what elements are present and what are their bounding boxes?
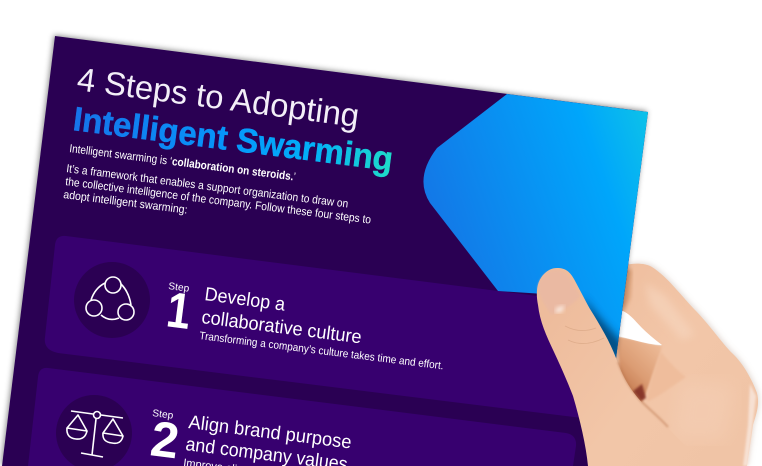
- paper sheet: [2, 36, 648, 466]
- thumb nail: [538, 270, 580, 315]
- hand: thumb: [537, 268, 705, 466]
- intro text: Intelligent swarming is ‘collaboration on steroids.’: [69, 143, 296, 184]
- step 2 heading: Align brand purpose: [187, 412, 353, 454]
- step 1 icon: collaboration circles: [74, 262, 150, 338]
- step 1 card: [45, 236, 600, 419]
- panel: step 2: [28, 368, 576, 466]
- intro text: adopt intelligent swarming:: [63, 189, 188, 217]
- thumb shadow on blue: [584, 296, 619, 358]
- step 2 icon: scales: [56, 395, 132, 466]
- knuckle lines: [565, 326, 604, 344]
- panel: step 1: [45, 236, 600, 419]
- step 2 card: [28, 368, 576, 466]
- title line 1: 4 Steps to Adopting: [75, 60, 361, 134]
- panel: step 1: collaborative culture: [200, 307, 363, 348]
- intro text: [63, 143, 372, 227]
- step 1 heading: Develop a: [203, 284, 287, 316]
- intro text: the collective intelligence of the company. Follow these four steps to: [65, 176, 372, 227]
- blue corner shape: [423, 94, 648, 358]
- title line 2: Intelligent Swarming: [71, 100, 395, 179]
- hand: fingers behind the paper: [590, 264, 758, 466]
- step 2 label: Step: [152, 408, 174, 422]
- gap between thumb and finger: [610, 311, 662, 345]
- step 1 number: 1: [164, 281, 194, 340]
- step 1 description: Transforming a company’s culture takes time and effort.: [199, 330, 444, 372]
- thumb inner edge shadow: [618, 362, 668, 427]
- intro text: It’s a framework that enables a support organization to draw on: [66, 163, 349, 211]
- step 1 label: Step: [168, 281, 190, 295]
